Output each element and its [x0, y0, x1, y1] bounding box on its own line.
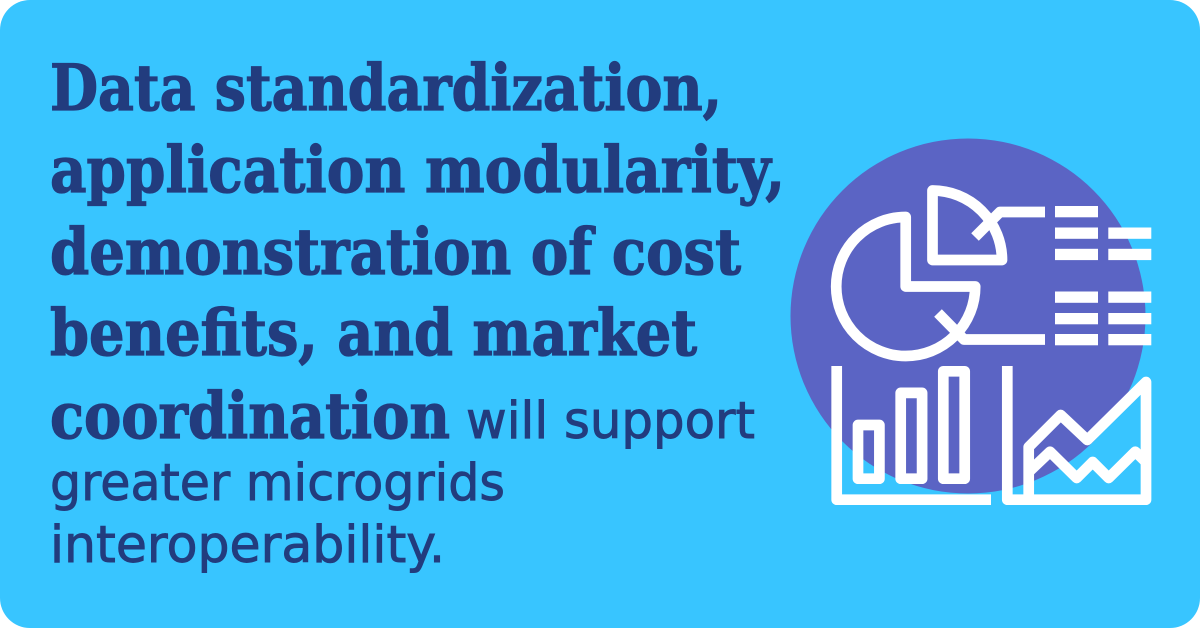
- icon: lower pie chart with leader: [836, 217, 1045, 356]
- heading line 2: application modularity,: [50, 133, 785, 208]
- body text: greater microgrids: greater microgrids: [50, 454, 505, 513]
- heading line 4: benefits, and market: [50, 296, 697, 371]
- body text: interoperability: interoperability.: [50, 516, 445, 575]
- heading line 5: coordination: [50, 379, 450, 454]
- icon: bar chart: [837, 366, 991, 500]
- heading line 1: Data standardization,: [50, 51, 722, 126]
- body text: will support: will support: [466, 392, 755, 451]
- purple circle behind icon: [790, 138, 1146, 494]
- icon: charts and data: [836, 190, 1151, 500]
- text block: main statement: [50, 51, 785, 575]
- icon: legend rows: [1055, 206, 1151, 345]
- icon: upper pie slice with leader: [932, 190, 1045, 260]
- heading line 3: demonstration of cost: [50, 215, 741, 290]
- icon: area chart: [1007, 366, 1146, 500]
